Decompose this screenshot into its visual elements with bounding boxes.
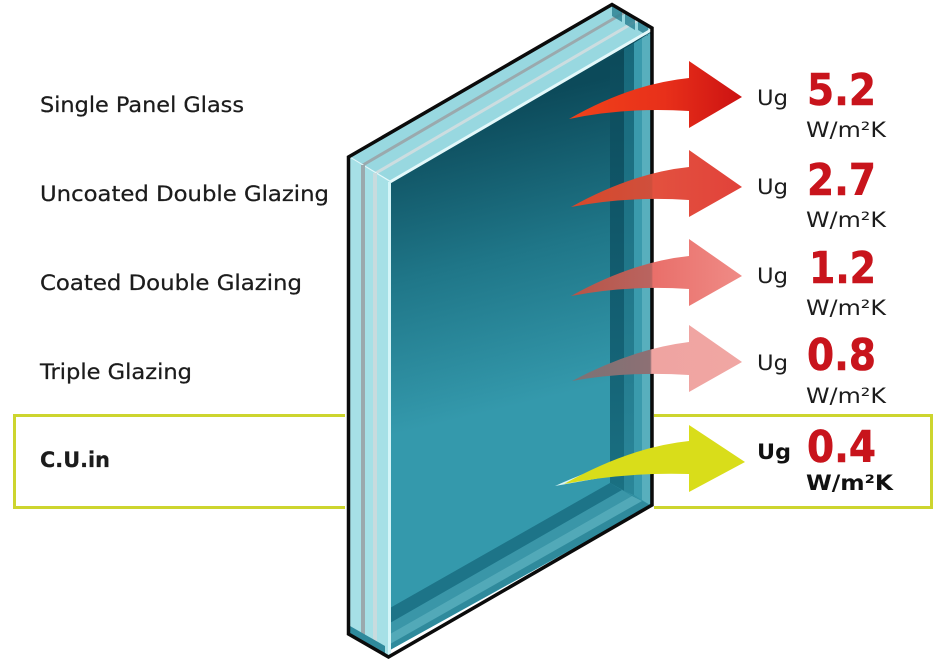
value row: 1.2: 1.2 (809, 243, 876, 294)
arrow: triple glazing (572, 325, 742, 392)
value row: 0.4: 0.4 (807, 422, 876, 473)
label: triple glazing: Triple Glazing (39, 360, 192, 384)
value row: 2.7: Ug (757, 175, 788, 199)
label: C.U.in: C.U.in (40, 448, 110, 472)
value row: 5.2: 5.2 (807, 65, 876, 116)
value row: 5.2: Ug (757, 86, 788, 110)
values (757, 65, 894, 495)
label: uncoated double glazing: Uncoated Double Glazing (40, 182, 329, 206)
value row: 2.7 (757, 155, 887, 232)
label: coated double glazing: Coated Double Glazing (40, 271, 302, 295)
value row: 0.8 (757, 330, 887, 408)
value row: 0.4 (757, 422, 894, 495)
glass pane (348, 4, 652, 657)
black outline (348, 4, 652, 657)
right inner frame (610, 33, 652, 505)
interior glass face (390, 28, 652, 650)
arrow: coated double (571, 239, 742, 306)
top edge of panes (349, 4, 652, 182)
value row: 1.2: W/m²K (806, 296, 887, 320)
value row: 0.8: Ug (757, 351, 788, 375)
highlight box: C.U.in (14, 416, 932, 508)
value row: 2.7: W/m²K (806, 208, 887, 232)
value row: 1.2 (757, 243, 887, 320)
value row: 1.2: Ug (757, 264, 788, 288)
bottom inner frame (390, 483, 650, 650)
arrow: single panel (569, 61, 742, 128)
value row: 5.2: W/m²K (806, 118, 887, 142)
value row: 5.2 (757, 65, 887, 142)
arrow: C.U.in (555, 425, 745, 492)
label: single panel glass: Single Panel Glass (40, 93, 244, 117)
arrow: uncoated double (571, 150, 742, 217)
value row: 0.8: 0.8 (807, 330, 876, 381)
labels (39, 93, 329, 472)
value row: 2.7: 2.7 (807, 155, 876, 206)
left edge of panes (349, 157, 391, 657)
value row: 0.8: W/m²K (806, 384, 887, 408)
value row: 0.4: Ug (757, 440, 791, 464)
value row: 0.4: W/m²K (806, 471, 894, 495)
